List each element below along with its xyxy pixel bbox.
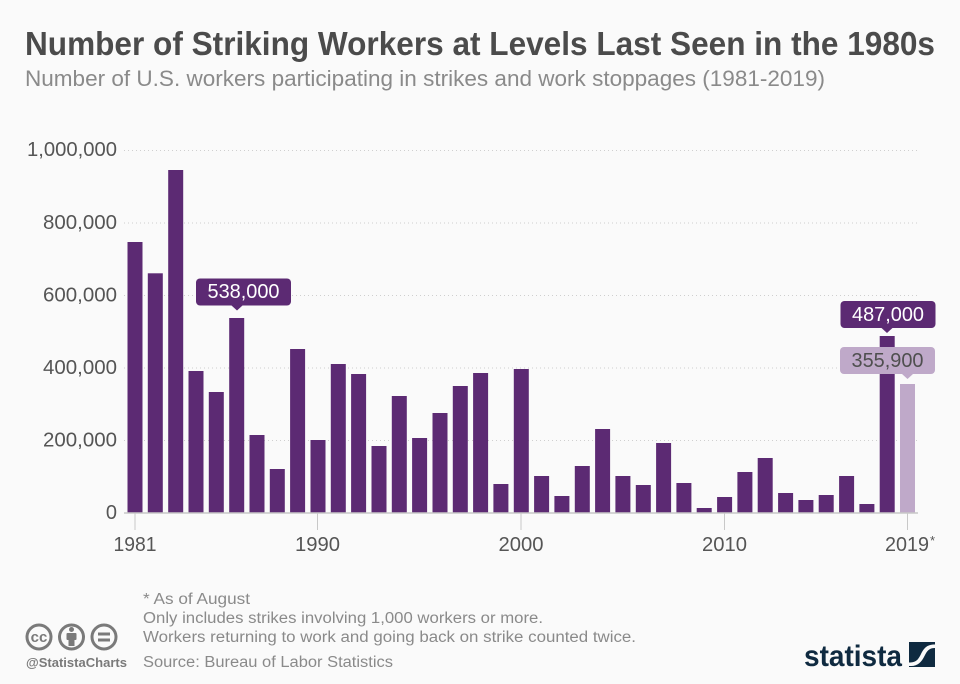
x axis labels: 2010 xyxy=(702,534,747,556)
footnotes: Workers returning to work and going back on strike counted twice. xyxy=(143,629,636,646)
icon: creative commons xyxy=(27,625,51,649)
handle: @StatistaCharts xyxy=(26,656,127,670)
y axis labels: 600,000 xyxy=(43,284,117,306)
x axis labels: 1981 xyxy=(114,534,156,556)
y axis labels: 400,000 xyxy=(43,357,117,379)
icon: creative commons: cc xyxy=(31,629,47,646)
x axis labels: * xyxy=(930,533,935,548)
x axis line and ticks xyxy=(124,513,918,530)
footnotes: Only includes strikes involving 1,000 workers or more. xyxy=(143,610,543,627)
callout: 538,000 xyxy=(196,278,291,310)
icon: attribution xyxy=(60,625,84,649)
callout: 538,000: 538,000 xyxy=(208,281,280,303)
y axis labels: 1,000,000 xyxy=(27,139,117,161)
icon: no derivatives xyxy=(92,625,116,649)
callout: 355,900: 355,900 xyxy=(852,350,924,372)
callout: 355,900 xyxy=(840,347,935,379)
source: Source: Bureau of Labor Statistics xyxy=(143,654,393,671)
statista logo: statista xyxy=(804,640,902,673)
grid lines xyxy=(124,150,918,440)
x axis labels: 2000 xyxy=(498,534,544,556)
bar chart xyxy=(128,170,915,513)
y axis labels: 0 xyxy=(106,502,117,524)
x axis labels: 2019 xyxy=(885,534,929,556)
x axis labels xyxy=(114,533,935,556)
footnotes: * As of August xyxy=(143,591,251,608)
subtitle: Number of U.S. workers participating in strikes and work stoppages (1981-2019) xyxy=(25,66,825,91)
y axis labels xyxy=(27,139,117,524)
y axis labels: 800,000 xyxy=(43,212,117,234)
footnotes xyxy=(143,591,636,646)
x axis labels: 1990 xyxy=(295,534,340,556)
y axis labels: 200,000 xyxy=(43,430,117,452)
callout: 487,000 xyxy=(840,301,936,333)
callout: 487,000: 487,000 xyxy=(852,304,924,326)
